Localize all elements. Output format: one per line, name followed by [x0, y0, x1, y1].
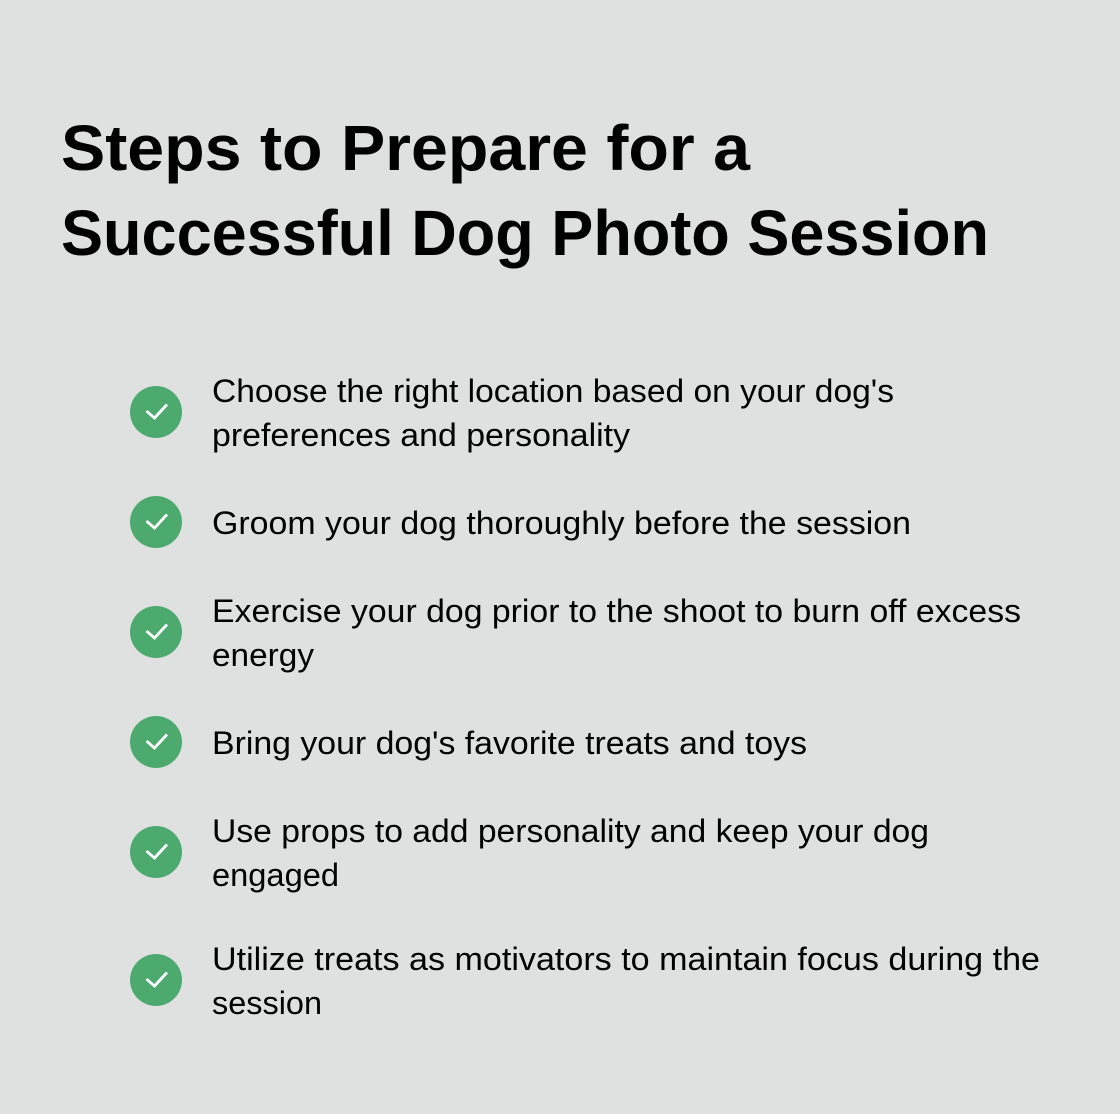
- text: choose location: preferences and personality: [212, 417, 630, 453]
- text: treats and toys: Bring your dog's favorite treats and toys: [212, 725, 807, 761]
- item: treats and toys: [130, 716, 807, 768]
- text: motivators: session: [212, 985, 322, 1021]
- text: motivators: Utilize treats as motivators to maintain focus during the: [212, 941, 1040, 977]
- icon: check 1: [130, 386, 182, 438]
- icon: check 5: [130, 826, 182, 878]
- item: choose location: [130, 373, 894, 453]
- title: Successful Dog Photo Session: [61, 197, 989, 269]
- text: exercise: Exercise your dog prior to the shoot to burn off excess: [212, 593, 1021, 629]
- icon: check 2: [130, 496, 182, 548]
- title: [61, 112, 989, 269]
- text: groom: Groom your dog thoroughly before the session: [212, 505, 911, 541]
- icon: check 3: [130, 606, 182, 658]
- icon: check 6: [130, 954, 182, 1006]
- checklist: [130, 373, 1040, 1021]
- item: motivators: [130, 941, 1040, 1021]
- icon: check 4: [130, 716, 182, 768]
- text: exercise: energy: [212, 637, 314, 673]
- text: props: [212, 813, 929, 893]
- item: props: [130, 813, 929, 893]
- item: groom: [130, 496, 911, 548]
- text: choose location: Choose the right location based on your dog's: [212, 373, 894, 409]
- text: motivators: [212, 941, 1040, 1021]
- title: Steps to Prepare for a: [61, 112, 750, 184]
- item: exercise: [130, 593, 1021, 673]
- text: exercise: [212, 593, 1021, 673]
- text: choose location: [212, 373, 894, 453]
- text: props: Use props to add personality and keep your dog: [212, 813, 929, 849]
- text: props: engaged: [212, 857, 339, 893]
